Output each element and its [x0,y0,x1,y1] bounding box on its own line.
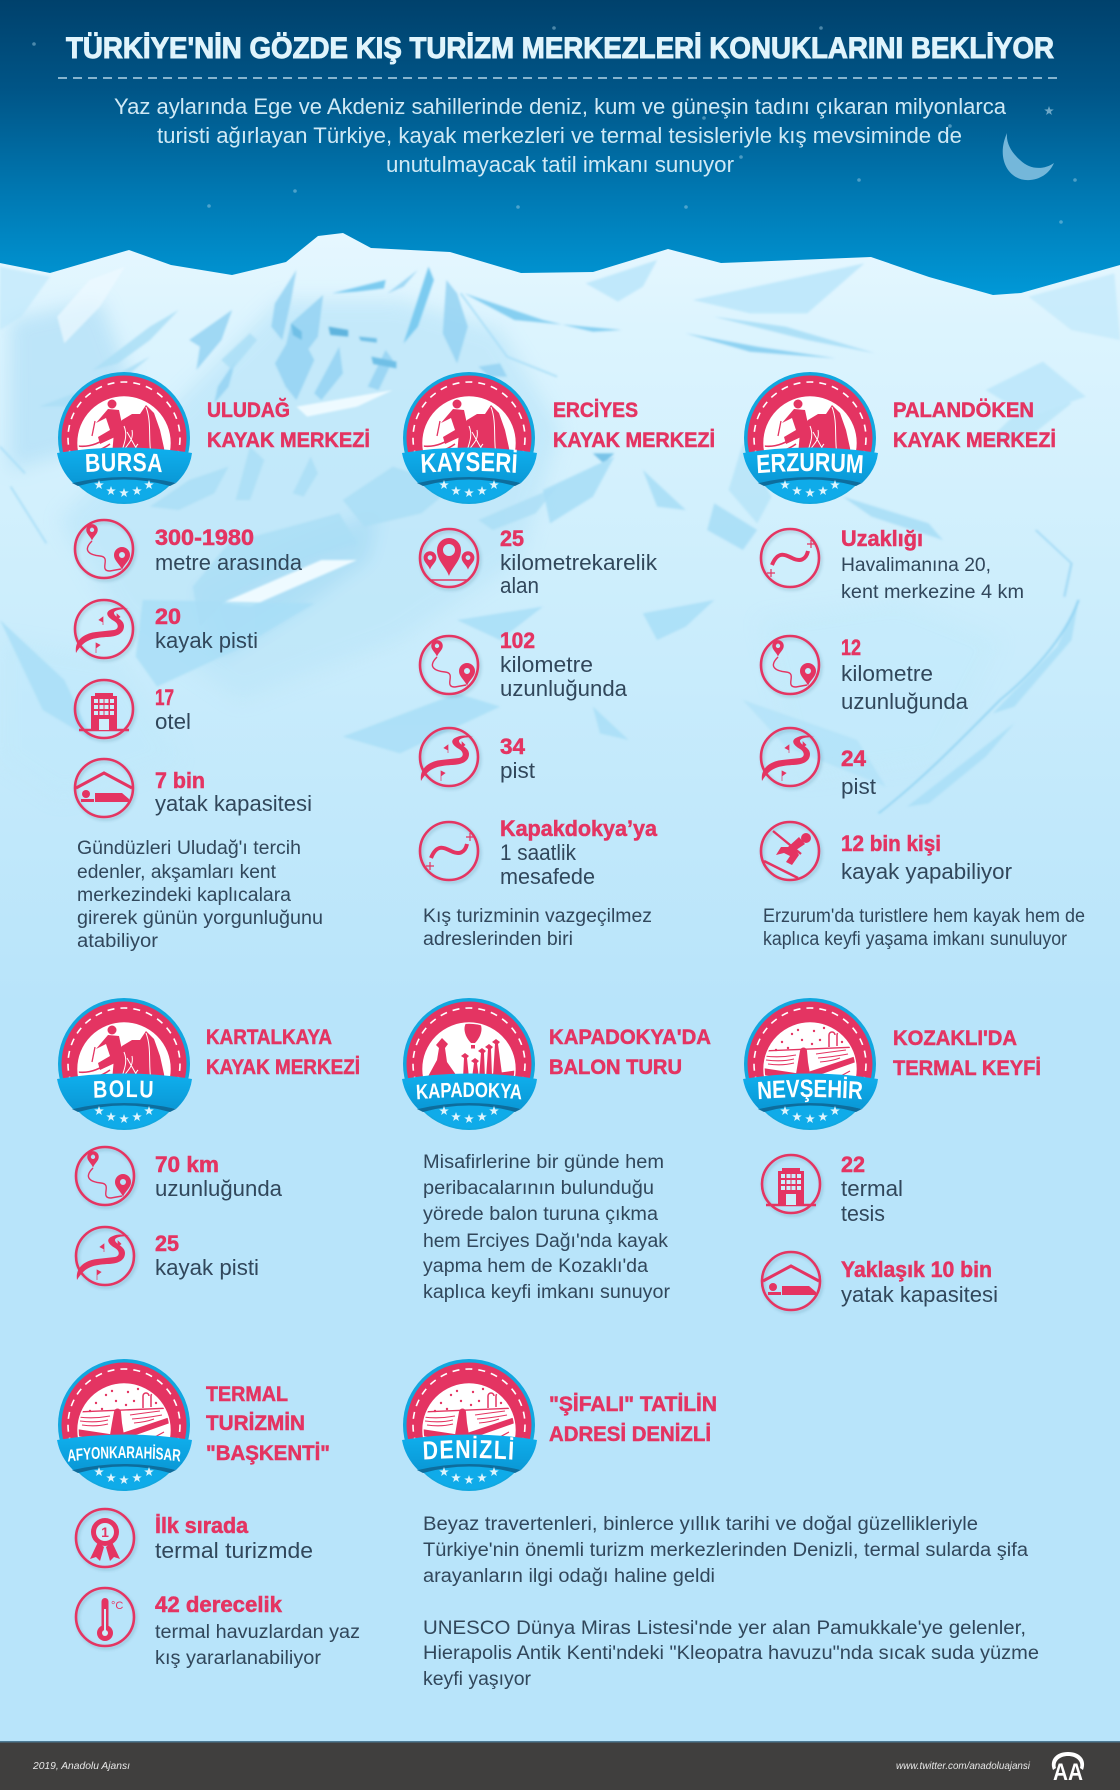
heading: Şifalı tatilin adresi Denizli [549,1393,717,1446]
stat: Kapadokya 1 saatlik: Kapakdokya’ya [500,816,658,841]
text block: Uludağ note [77,838,323,952]
text block: Denizli description: UNESCO Dünya Miras Listesi'nde yer alan Pamukkale'ye gelenler, [423,1618,1026,1639]
heading: Palandöken Kayak Merkezi [893,399,1056,452]
text block: Denizli description: arayanların ilgi odağı haline geldi [423,1566,715,1587]
panel: Denizli [402,1359,1039,1690]
stat: 12 kilometre: kilometre [841,661,933,686]
heading: Kapadokya'da Balon Turu [549,1026,711,1079]
stat: 34 pist [420,728,535,786]
stat: Kapadokya 1 saatlik: mesafede [500,864,595,889]
badge: Kapadokya: KAPADOKYA [416,1082,522,1100]
stat: Uzaklığı: Uzaklığı [841,526,923,551]
stat: 24 pist [761,728,876,799]
stat: Uzaklığı: Havalimanına 20, [841,555,991,576]
heading: Termal Turizmin Başkenti: TURİZMİN [206,1412,305,1435]
stat: 22 termal tesis: termal [841,1176,903,1201]
badge: Erzurum [743,372,878,504]
stat: ilk sırada [76,1509,313,1567]
heading: Termal Turizmin Başkenti: TERMAL [206,1383,288,1406]
heading: Kozaklı'da Termal Keyfi [893,1027,1041,1080]
badge: Denizli [402,1359,537,1491]
stat: 22 termal tesis: 22 [841,1152,865,1177]
badge: Bolu [57,998,192,1130]
intro text [114,94,1007,177]
stat: 25 kayak pisti [76,1227,259,1285]
text block: Uludağ note: girerek günün yorgunluğunu [77,908,323,929]
panel: Erciyes [402,372,715,950]
heading: Palandöken Kayak Merkezi: KAYAK MERKEZİ [893,429,1056,452]
text block: Uludağ note: Gündüzleri Uludağ'ı tercih [77,838,301,859]
stat: 70 km: uzunluğunda [155,1176,283,1201]
stat: Kapadokya 1 saatlik: 1 saatlik [500,840,577,865]
stat: 7 bin yatak [75,759,312,817]
stat: 25 kilometrekarelik: 25 [500,526,524,551]
footer: www.twitter.com/anadoluajansi [896,1760,1031,1772]
heading: Erciyes Kayak Merkezi [553,399,715,452]
intro text: Yaz aylarında Ege ve Akdeniz sahillerinde deniz, kum ve güneşin tadını çıkaran milyonlarca [114,94,1007,119]
stat: 102 kilometre: uzunluğunda [500,676,628,701]
stat: 34 pist: pist [500,758,535,783]
badge: Afyonkarahisar [57,1359,192,1491]
panel: Kozaklı [743,998,1041,1314]
stat: 25 kilometrekarelik: alan [500,573,539,598]
heading: Şifalı tatilin adresi Denizli: ADRESİ DENİZLİ [549,1423,711,1446]
footer [0,1741,1120,1790]
stat: 12 bin kişi: 12 bin kişi [841,831,941,856]
text block: Uludağ note: atabiliyor [77,931,159,952]
heading: Termal Turizmin Başkenti [206,1383,330,1465]
stat: yaklaşık 10 bin: Yaklaşık 10 bin [841,1257,992,1282]
stat: 7 bin yatak: yatak kapasitesi [155,791,312,816]
stat: 12 kilometre: uzunluğunda [841,689,969,714]
stat: 300-1980 metre: metre arasında [155,550,303,575]
heading: Kozaklı'da Termal Keyfi: TERMAL KEYFİ [893,1057,1041,1080]
stat: 70 km: 70 km [155,1152,219,1177]
stat: 102 kilometre: kilometre [500,652,593,677]
stat: 22 termal tesis [762,1152,903,1226]
panel: Palandöken [743,372,1085,950]
stat: 34 pist: 34 [500,734,526,759]
intro text: unutulmayacak tatil imkanı sunuyor [386,152,734,177]
panel: Kapadokya balon turu [402,998,711,1303]
intro text: turisti ağırlayan Türkiye, kayak merkezleri ve termal tesisleriyle kış mevsiminde de [157,123,962,148]
icon: crescent moon [1003,133,1054,180]
badge: Denizli: DENİZLİ [424,1436,514,1460]
title: TÜRKİYE'NİN GÖZDE KIŞ TURİZM MERKEZLERİ KONUKLARINI BEKLİYOR [66,32,1054,65]
stat: 42 derecelik [76,1588,360,1669]
text block: Erzurum note: Erzurum'da turistlere hem kayak hem de [763,906,1085,927]
stat: 102 kilometre [420,628,628,701]
stat: 12 bin kişi [761,822,1012,884]
heading: Şifalı tatilin adresi Denizli: "ŞİFALI" TATİLİN [549,1393,717,1416]
stat: Uzaklığı [761,526,1024,603]
stat: 42 derecelik: 42 derecelik [155,1592,283,1617]
stat: 12 kilometre [761,635,969,714]
stat: 17 otel [75,680,191,738]
stat: 24 pist: 24 [841,746,867,771]
stat: yaklaşık 10 bin [762,1252,998,1310]
badge: Bursa [57,372,192,504]
stat: 20 kayak pisti: 20 [155,604,181,629]
badge: Nevşehir [743,998,878,1130]
badge: Erzurum: ERZURUM [757,453,863,474]
badge: Nevşehir: NEVŞEHİR [758,1076,862,1102]
stat: 12 kilometre: 12 [841,635,861,660]
stat: 102 kilometre: 102 [500,628,535,653]
text block: Kapadokya description: hem Erciyes Dağı'nda kayak [423,1231,669,1252]
badge: Bursa: BURSA [86,453,162,472]
heading: Kapadokya'da Balon Turu: KAPADOKYA'DA [549,1026,711,1049]
text block: Erzurum note: kaplıca keyfi yaşama imkanı sunuluyor [763,929,1068,950]
heading: Palandöken Kayak Merkezi: PALANDÖKEN [893,399,1034,422]
icon: AA logo: AA [1053,1759,1083,1786]
text block: Erciyes note [423,906,652,950]
icon: star [1044,106,1054,115]
stat: 17 otel: otel [155,709,191,734]
panel: Kartalkaya [57,998,360,1290]
text block: Kapadokya description: peribacalarının bulunduğu [423,1178,654,1199]
stat: 25 kayak pisti: kayak pisti [155,1255,259,1280]
text block: Uludağ note: edenler, akşamları kent [77,862,277,883]
stat: 25 kilometrekarelik: kilometrekarelik [500,550,658,575]
stat: Uzaklığı: kent merkezine 4 km [841,582,1024,603]
heading: Kapadokya'da Balon Turu: BALON TURU [549,1056,682,1079]
text block: Denizli description: Hierapolis Antik Kenti'ndeki "Kleopatra havuzu"nda sıcak suda yüzme [423,1643,1039,1664]
stat: 70 km [76,1147,283,1205]
text block: Kapadokya description: kaplıca keyfi imkanı sunuyor [423,1282,671,1303]
heading: Uludağ Kayak Merkezi [207,398,370,452]
text block: Kapadokya description [423,1152,671,1303]
text block: Kapadokya description: yapma hem de Kozaklı'da [423,1256,648,1277]
heading: Erciyes Kayak Merkezi: ERCİYES [553,399,638,422]
badge: Kayseri: KAYSERİ [422,450,517,473]
stat: 300-1980 metre [75,520,303,578]
heading: Kartalkaya Kayak Merkezi: KARTALKAYA [206,1026,332,1049]
illustration: snowy mountains [0,233,1120,1010]
stat: 7 bin yatak: 7 bin [155,768,205,793]
footer: 2019, Anadolu Ajansı [32,1760,130,1772]
text block: Kapadokya description: Misafirlerine bir günde hem [423,1152,664,1173]
text block: Denizli description: keyfi yaşıyor [423,1669,532,1690]
stat: 17 otel: 17 [155,685,174,710]
stat: 25 kilometrekarelik [420,526,658,598]
stat: 42 derecelik: kış yararlanabiliyor [155,1648,322,1669]
panel: Uludağ [57,372,370,952]
text block: Erciyes note: Kış turizminin vazgeçilmez [423,906,652,927]
text block: Erzurum note [763,906,1085,950]
stat: Kapadokya 1 saatlik [420,816,658,889]
stat: 24 pist: pist [841,774,876,799]
text block: Erciyes note: adreslerinden biri [423,929,573,950]
badge: Afyonkarahisar: AFYONKARAHİSAR [68,1444,180,1462]
stat: 20 kayak pisti: kayak pisti [155,628,258,653]
night sky [0,0,1120,300]
stat: 20 kayak pisti [75,600,258,658]
heading: Kartalkaya Kayak Merkezi [206,1026,360,1079]
heading: Uludağ Kayak Merkezi: ULUDAĞ [207,398,290,422]
heading: Kartalkaya Kayak Merkezi: KAYAK MERKEZİ [206,1056,360,1079]
heading: Uludağ Kayak Merkezi: KAYAK MERKEZİ [207,429,370,452]
stat: 12 bin kişi: kayak yapabiliyor [841,859,1012,884]
text block: Uludağ note: merkezindeki kaplıcalara [77,885,291,906]
badge: Kayseri [402,372,537,504]
badge: Kapadokya [402,998,537,1130]
stat: 300-1980 metre: 300-1980 [155,525,254,550]
text block: Denizli description: Türkiye'nin önemli turizm merkezlerinden Denizli, termal sularda şifa [423,1540,1028,1561]
heading: Erciyes Kayak Merkezi: KAYAK MERKEZİ [553,429,715,452]
heading: Kozaklı'da Termal Keyfi: KOZAKLI'DA [893,1027,1017,1050]
heading: Termal Turizmin Başkenti: "BAŞKENTİ" [206,1442,330,1465]
text block: Denizli description: Beyaz travertenleri, binlerce yıllık tarihi ve doğal güzellikleriyle [423,1514,978,1535]
stat: ilk sırada: İlk sırada [155,1513,249,1538]
stat: 22 termal tesis: tesis [841,1201,885,1226]
stat: 25 kayak pisti: 25 [155,1231,179,1256]
badge: Bolu: BOLU [94,1080,153,1098]
text block: Kapadokya description: yörede balon turuna çıkma [423,1204,658,1225]
panel: Afyonkarahisar [57,1359,360,1669]
stat: ilk sırada: termal turizmde [155,1538,313,1563]
stat: 42 derecelik: termal havuzlardan yaz [155,1622,360,1643]
text block: Denizli description [423,1514,1039,1690]
stat: yaklaşık 10 bin: yatak kapasitesi [841,1282,998,1307]
